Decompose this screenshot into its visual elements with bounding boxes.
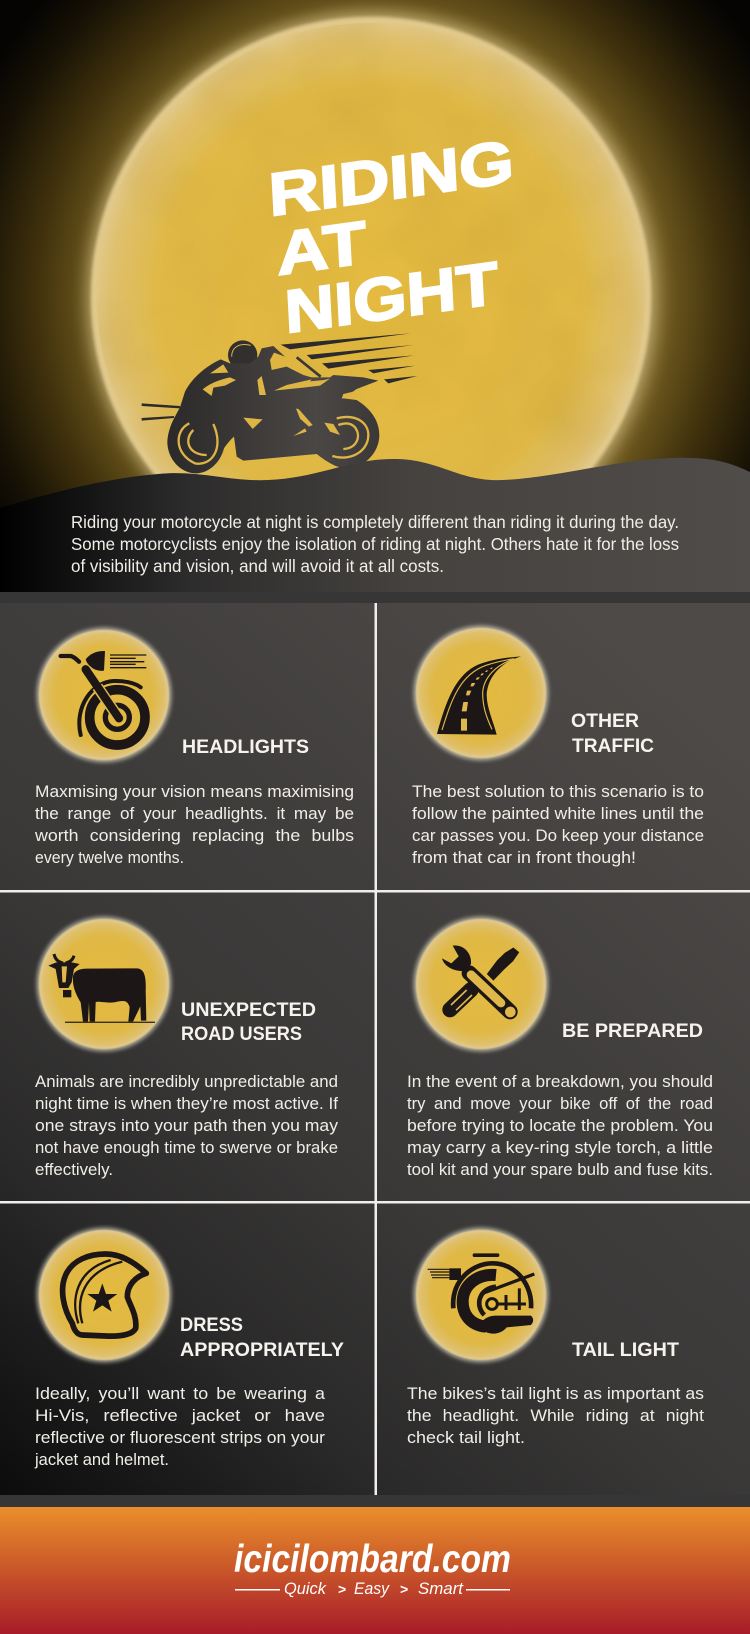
icon: tools moon: [414, 917, 548, 1051]
text block: In the event of a breakdown, you should: [407, 1072, 713, 1091]
heading: ROAD USERS: [181, 1024, 302, 1045]
tagline: Easy: [354, 1579, 390, 1598]
icon: cow moon: [37, 917, 171, 1051]
title: NIGHT: [283, 249, 500, 346]
tagline: Quick: [284, 1579, 327, 1598]
text block: follow the painted white lines until the: [412, 804, 704, 823]
heading: OTHER: [571, 711, 639, 732]
panel: be prepared: [407, 917, 713, 1179]
text block: one strays into your path then you may: [35, 1116, 339, 1135]
intro text: Some motorcyclists enjoy the isolation of riding at night. Others hate it for the loss: [71, 534, 679, 554]
text block: [407, 1384, 704, 1447]
text block: may carry a key-ring style torch, a little: [407, 1138, 713, 1157]
icon: motorcycle and rider: [142, 333, 417, 473]
text block: car passes you. Do keep your distance: [412, 826, 704, 845]
text block: check tail light.: [407, 1428, 525, 1447]
icon: tail light moon: [414, 1228, 548, 1362]
text block: from that car in front though!: [412, 848, 636, 867]
text block: Hi-Vis, reflective jacket or have: [35, 1406, 325, 1425]
text block: effectively.: [35, 1160, 113, 1179]
title: AT: [275, 208, 368, 288]
tagline: [235, 1579, 510, 1598]
full moon: [87, 13, 655, 581]
panel: dress appropriately: [34, 1228, 344, 1469]
text block: [412, 782, 704, 867]
footer band: [0, 1507, 750, 1634]
heading: TRAFFIC: [572, 736, 654, 757]
heading: [180, 1315, 344, 1361]
text block: try and move your bike off of the road: [407, 1094, 713, 1113]
logo text: icicilombard.com: [234, 1538, 511, 1581]
text block: [34, 1384, 326, 1469]
heading: HEADLIGHTS: [182, 737, 309, 758]
text block: [407, 1072, 713, 1179]
icon: road moon: [414, 626, 548, 760]
panel: tail light: [407, 1228, 704, 1447]
tagline: Smart: [418, 1579, 464, 1598]
night sky background: [0, 0, 750, 600]
heading: DRESS: [180, 1315, 243, 1336]
text block: every twelve months.: [35, 848, 184, 867]
intro text: of visibility and vision, and will avoid it at all costs.: [71, 556, 444, 576]
text block: Ideally, you’ll want to be wearing a: [35, 1384, 326, 1403]
text block: tool kit and your spare bulb and fuse kits.: [407, 1160, 713, 1179]
heading: APPROPRIATELY: [180, 1340, 344, 1361]
intro text: Riding your motorcycle at night is completely different than riding it during the day.: [71, 512, 679, 532]
text block: night time is when they’re most active. If: [35, 1094, 338, 1113]
text block: Animals are incredibly unpredictable and: [35, 1072, 338, 1091]
heading: BE PREPARED: [562, 1021, 703, 1042]
intro text: [71, 512, 679, 576]
text block: not have enough time to swerve or brake: [35, 1138, 338, 1157]
text block: The bikes’s tail light is as important as: [407, 1384, 704, 1403]
heading: [181, 1000, 316, 1045]
heading: TAIL LIGHT: [572, 1340, 679, 1361]
text block: before trying to locate the problem. You: [407, 1116, 713, 1135]
tagline: >: [400, 1581, 408, 1597]
icon: headlight moon: [37, 628, 171, 762]
panel: unexpected road users: [35, 917, 339, 1179]
title: [267, 128, 515, 346]
text block: the range of your headlights. it may be: [35, 804, 354, 823]
panel: other traffic: [412, 626, 704, 867]
text block: [34, 782, 354, 867]
heading: [571, 711, 654, 757]
text block: the headlight. While riding at night: [407, 1406, 704, 1425]
title: RIDING: [267, 128, 515, 229]
text block: reflective or fluorescent strips on your: [35, 1428, 325, 1447]
tagline: >: [338, 1581, 346, 1597]
text block: Maxmising your vision means maximising: [35, 782, 354, 801]
icon: helmet moon: [37, 1228, 171, 1362]
hill: [0, 458, 750, 592]
heading: UNEXPECTED: [181, 1000, 316, 1021]
text block: jacket and helmet.: [34, 1450, 169, 1469]
text block: worth considering replacing the bulbs: [34, 826, 354, 845]
text block: [35, 1072, 339, 1179]
panel: headlights: [34, 628, 354, 867]
text block: The best solution to this scenario is to: [412, 782, 704, 801]
panels background: [0, 592, 750, 1507]
